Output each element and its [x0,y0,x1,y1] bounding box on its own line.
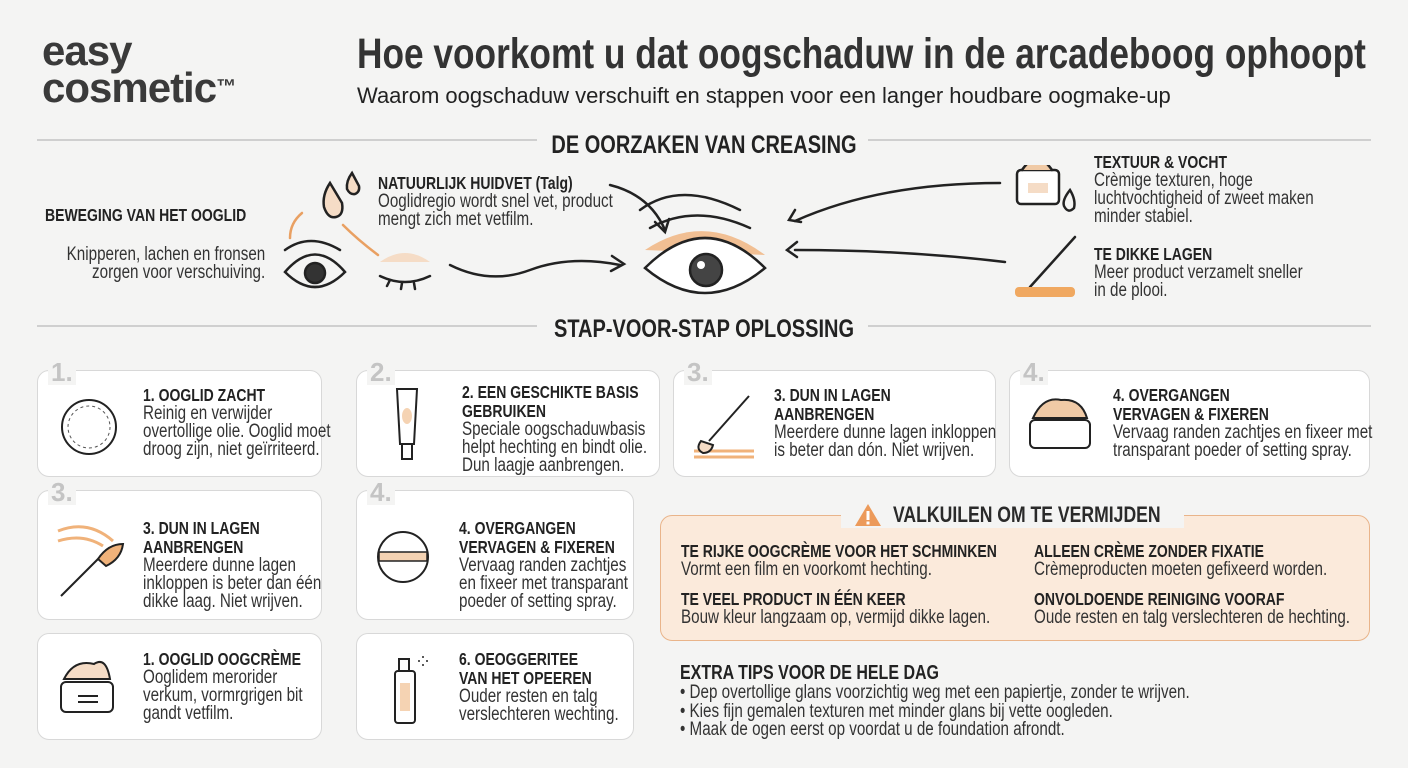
card 3: AANBRENGEN [774,404,874,424]
card 3: is beter dan dón. Niet wrijven. [774,440,974,461]
card 7: Ooglidem merorider [143,667,277,688]
cause: huidvet: mengt zich met vetfilm. [378,209,533,230]
card 2: 2. [370,357,392,387]
extra tips: • Dep overtollige glans voorzichtig weg met een papiertje, zonder te wrijven. [680,682,1190,703]
panel: valkuilen: Crèmeproducten moeten gefixeerd worden. [1034,559,1327,580]
card 4: 4. [1023,357,1045,387]
cause: textuur: Crèmige texturen, hoge [1094,170,1253,191]
card 1 [37,370,322,477]
card 4: Vervaag randen zachtjes en fixeer met [1113,422,1372,443]
card 2: Speciale oogschaduwbasis [462,419,645,440]
card 3: Meerdere dunne lagen inkloppen [774,422,996,443]
panel: valkuilen [660,515,1370,641]
card 4: 4. OVERGANGEN [1113,385,1230,405]
title: Hoe voorkomt u dat oogschaduw in de arcadeboog ophoopt [357,30,1366,78]
cause: beweging: BEWEGING VAN HET OOGLID [45,205,246,225]
logo [42,27,235,111]
panel: valkuilen: ALLEEN CRÈME ZONDER FIXATIE [1034,541,1264,561]
card 4 [1009,370,1370,477]
card 8 [356,633,634,740]
cause: lagen: TE DIKKE LAGEN [1094,244,1212,264]
heading: causes: DE OORZAKEN VAN CREASING [551,131,857,159]
card 7: verkum, vormrgrigen bit [143,685,303,706]
subtitle: Waarom oogschaduw verschuift en stappen voor een langer houdbare oogmake-up [357,83,1171,108]
card 6: 4. OVERGANGEN [459,518,576,538]
icons: eye and drops [283,165,1076,297]
cause: huidvet: NATUURLIJK HUIDVET (Talg) [378,173,573,193]
card 1: overtollige olie. Ooglid moet [143,421,331,442]
card 7: gandt vetfilm. [143,703,233,724]
card 5: 3. [51,477,73,507]
card 7 [37,633,322,740]
cause: textuur: luchtvochtigheid of zweet maken [1094,188,1314,209]
card 2 [356,370,660,477]
card 6: 4. [370,477,392,507]
cause: lagen [1094,244,1303,301]
extra tips: EXTRA TIPS VOOR DE HELE DAG [680,662,939,684]
card 8: verslechteren wechting. [459,704,619,725]
card 5: inkloppen is beter dan één [143,573,321,594]
card 6: poeder of setting spray. [459,591,617,612]
card 1: 1. [51,357,73,387]
card 1: droog zijn, niet geïrriteerd. [143,439,320,460]
card 6: VERVAGEN & FIXEREN [459,537,615,557]
card 5: AANBRENGEN [143,537,243,557]
card 2: helpt hechting en bindt olie. [462,437,647,458]
panel: valkuilen: TE VEEL PRODUCT IN ÉÉN KEER [681,589,906,609]
card 1: Reinig en verwijder [143,403,272,424]
card 6: Vervaag randen zachtjes [459,555,626,576]
card 2: GEBRUIKEN [462,401,546,421]
card 6 [356,490,634,620]
extra tips [680,662,1190,740]
cause: textuur [1094,152,1314,227]
card 4: VERVAGEN & FIXEREN [1113,404,1269,424]
card 8: 6. OEOGGERITEE [459,649,578,669]
heading: solution: STAP-VOOR-STAP OPLOSSING [554,315,854,343]
card 8: Ouder resten en talg [459,686,598,707]
card 8: VAN HET OPEEREN [459,668,592,688]
cause: beweging [45,205,265,283]
extra tips: • Kies fijn gemalen texturen met minder glans bij vette oogleden. [680,700,1113,722]
cause: huidvet: Ooglidregio wordt snel vet, product [378,191,613,212]
logo: cosmetic™ [42,64,235,111]
warning heading: VALKUILEN OM TE VERMIJDEN [893,502,1161,527]
card 2: Dun laagje aanbrengen. [462,455,624,476]
card 5 [37,490,322,620]
panel: valkuilen: Vormt een film en voorkomt hechting. [681,559,932,580]
card 3: 3. DUN IN LAGEN [774,385,891,405]
panel: valkuilen: TE RIJKE OOGCRÈME VOOR HET SCHMINKEN [681,541,997,561]
cause: textuur: minder stabiel. [1094,206,1193,227]
cause: beweging: zorgen voor verschuiving. [92,262,265,283]
logo: easy [42,27,131,74]
card 5: 3. DUN IN LAGEN [143,518,260,538]
cause: huidvet [378,173,613,230]
card 2: 2. EEN GESCHIKTE BASIS [462,382,639,402]
card 3 [673,370,996,477]
cause: beweging: Knipperen, lachen en fronsen [66,244,265,265]
panel: valkuilen: ONVOLDOENDE REINIGING VOORAF [1034,589,1284,609]
card 5: Meerdere dunne lagen [143,555,296,576]
cause: lagen: Meer product verzamelt sneller [1094,262,1303,283]
card 5: dikke laag. Niet wrijven. [143,591,303,612]
cause: textuur: TEXTUUR & VOCHT [1094,152,1227,172]
card 4: transparant poeder of setting spray. [1113,440,1352,461]
panel: valkuilen: Bouw kleur langzaam op, vermijd dikke lagen. [681,607,990,628]
card 6: en fixeer met transparant [459,573,628,594]
card 7: 1. OOGLID OOGCRÈME [143,649,301,669]
card 1: 1. OOGLID ZACHT [143,385,265,405]
panel: valkuilen: Oude resten en talg verslechteren de hechting. [1034,607,1350,628]
card 3: 3. [687,357,709,387]
extra tips: • Maak de ogen eerst op voordat u de foundation afrondt. [680,719,1065,740]
cause: lagen: in de plooi. [1094,280,1168,301]
